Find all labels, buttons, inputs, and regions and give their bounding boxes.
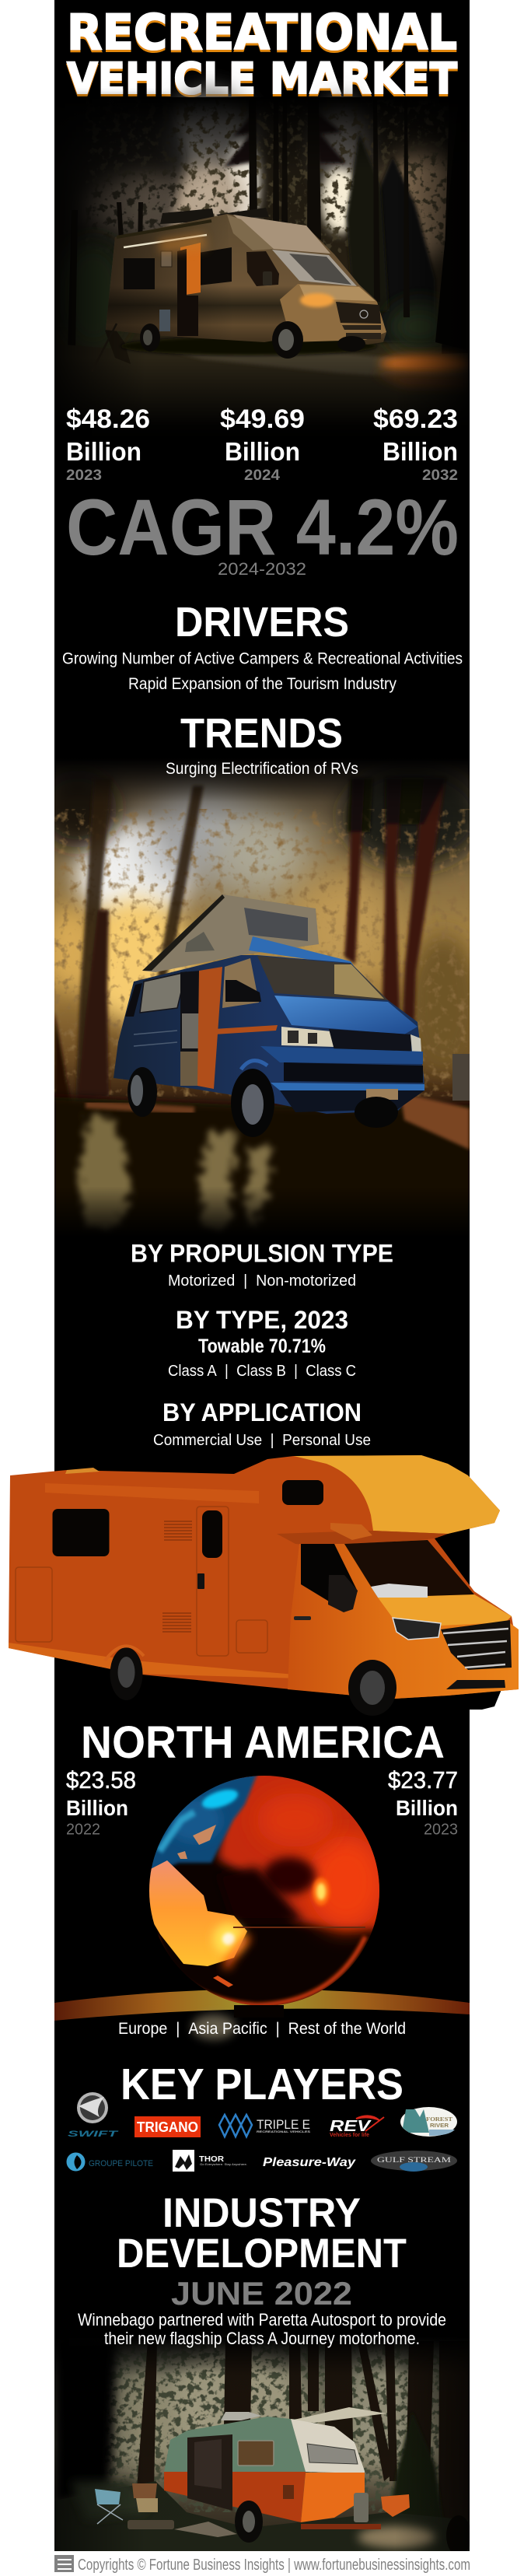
stat: 2023 value: $48.26	[66, 404, 150, 434]
footer: logo	[54, 2555, 74, 2572]
text: industry news: their new flagship Class A Journey motorhome.	[104, 2329, 420, 2348]
heading: industry development: INDUSTRY	[162, 2190, 361, 2236]
icon: vintage trailer camp scene	[95, 2407, 410, 2543]
title	[67, 4, 457, 103]
logo: Thor	[173, 2150, 247, 2172]
driver: tourism expansion: Rapid Expansion of the Tourism Industry	[128, 675, 396, 693]
stat: 2024 value	[220, 404, 305, 484]
stat: 2024 value: Billion	[225, 437, 300, 466]
stat: 2023 value	[66, 404, 150, 484]
panel: black background	[54, 0, 470, 2551]
logo: Forest River	[400, 2107, 457, 2137]
CAGR period: 2024-2032	[218, 559, 306, 579]
logo: REV: Vehicles for life	[330, 2133, 369, 2138]
stat: north america 2022: $23.58	[66, 1766, 136, 1794]
stat: 2024 value: $49.69	[220, 404, 305, 434]
stat: north america 2023: 2023	[424, 1822, 458, 1839]
logo: Thor: THOR	[199, 2155, 225, 2164]
stat: 2032 value: Billion	[383, 437, 458, 466]
icon: brown camper van	[92, 208, 386, 372]
text: application segments: Commercial Use | Personal Use	[153, 1432, 371, 1449]
driver: active campers: Growing Number of Active Campers & Recreational Activities	[62, 650, 463, 667]
logo: Gulf Stream	[371, 2151, 457, 2172]
heading: by application: BY APPLICATION	[162, 1398, 362, 1426]
icon: orange class C motorhome	[9, 1455, 519, 1716]
stat: 2023 value: Billion	[66, 437, 141, 466]
heading: drivers: DRIVERS	[175, 599, 349, 646]
CAGR headline: CAGR 4.2%	[66, 483, 459, 572]
icon: blue pop-top camper van	[114, 894, 424, 1137]
title: VEHICLE MARKET	[67, 54, 457, 103]
text: industry news	[78, 2310, 446, 2348]
stat: 2023 value: 2023	[66, 467, 102, 484]
heading: trends: TRENDS	[180, 710, 343, 757]
logo: Groupe Pilote: GROUPE PILOTE	[89, 2159, 153, 2168]
stat: north america 2022	[66, 1766, 136, 1839]
heading: by type: BY TYPE, 2023	[176, 1306, 348, 1334]
stat: north america 2023: Billion	[396, 1796, 458, 1820]
text: class segments: Class A | Class B | Class C	[168, 1363, 356, 1380]
logo: Swift	[68, 2092, 119, 2139]
image: forest backdrop with pop-top van	[54, 764, 470, 1232]
logo: Groupe Pilote	[67, 2153, 153, 2172]
text: trend: Surging Electrification of RVs	[166, 760, 358, 778]
stat: 2032 value: $69.23	[373, 404, 458, 434]
stat: 2032 value: 2032	[422, 467, 458, 484]
stat: north america 2022: Billion	[66, 1796, 128, 1820]
heading: industry development	[117, 2190, 407, 2277]
text: towable share: Towable 70.71%	[198, 1335, 326, 1357]
logo: Pleasure-Way: Pleasure-Way	[263, 2156, 356, 2169]
stat: 2024 value: 2024	[244, 467, 280, 484]
stat: north america 2023	[388, 1766, 458, 1839]
logo: REV: REV	[330, 2118, 372, 2135]
logo: Gulf Stream: GULF STREAM	[377, 2157, 452, 2165]
logo: Swift: SWIFT	[68, 2130, 119, 2139]
illustration: glowing globe on platform	[54, 1766, 470, 2039]
logo: Triple E: TRIPLE E	[257, 2117, 310, 2132]
stat: north america 2022: 2022	[66, 1822, 100, 1839]
logo: Triple E	[219, 2115, 310, 2137]
stat: 2032 value	[373, 404, 458, 484]
text: industry news: Winnebago partnered with Paretta Autosport to provide	[78, 2310, 446, 2329]
heading: north america: NORTH AMERICA	[81, 1717, 445, 1768]
heading: key players: KEY PLAYERS	[121, 2060, 403, 2109]
logo: Trigano: TRIGANO	[137, 2119, 198, 2135]
image: camper van in forest	[54, 89, 473, 439]
text: other regions: Europe | Asia Pacific | Rest of the World	[118, 2020, 406, 2038]
stat: north america 2023: $23.77	[388, 1766, 458, 1794]
text: propulsion segments: Motorized | Non-motorized	[168, 1272, 356, 1290]
title: RECREATIONAL	[67, 4, 457, 61]
heading: industry development: DEVELOPMENT	[117, 2231, 407, 2277]
date: JUNE 2022	[171, 2275, 352, 2312]
logo: REV	[330, 2116, 384, 2138]
logo: Triple E: RECREATIONAL VEHICLES	[257, 2130, 310, 2133]
logo: Thor: Go Everywhere. Stay Anywhere.	[200, 2163, 247, 2166]
heading: by propulsion type: BY PROPULSION TYPE	[131, 1240, 393, 1268]
image: forest backdrop with trailer	[54, 2337, 471, 2556]
logo: Forest River: FOREST	[426, 2116, 452, 2123]
logo: Forest River: RIVER	[430, 2123, 449, 2129]
